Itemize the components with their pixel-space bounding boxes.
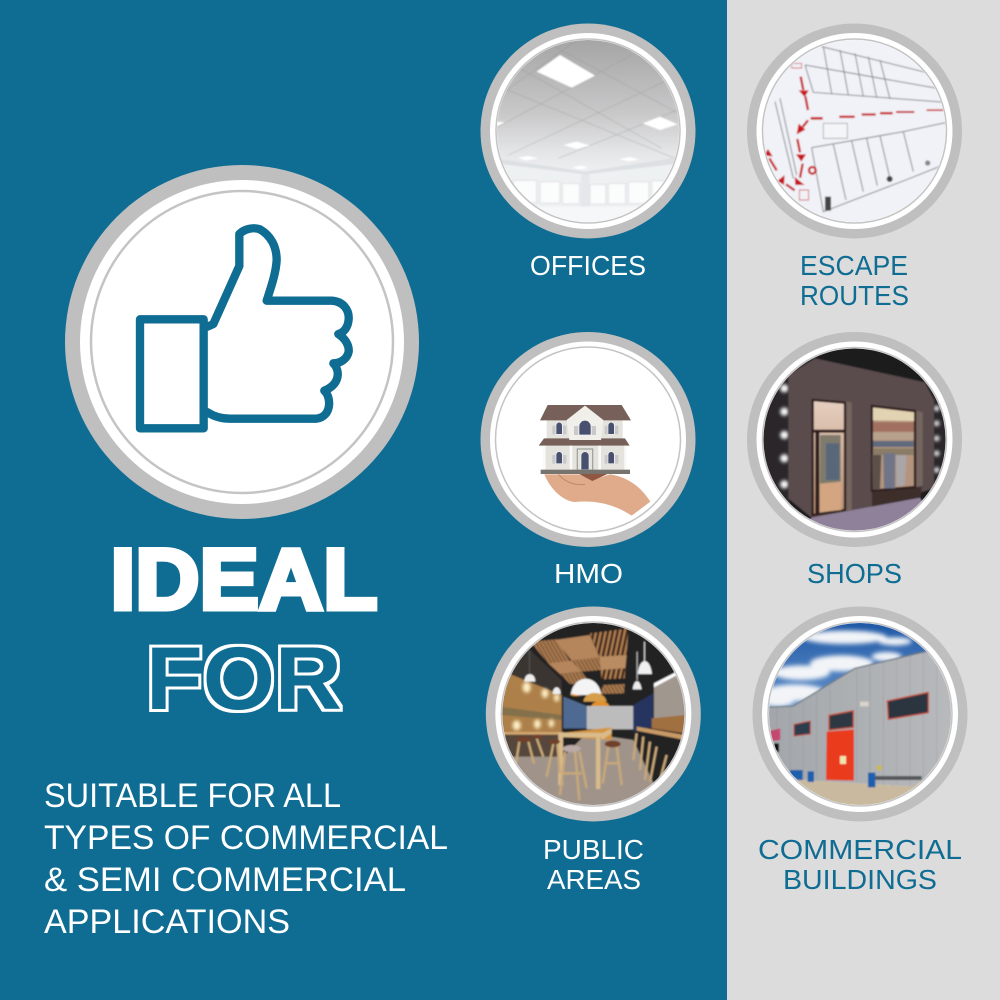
panel: escape routes	[747, 24, 962, 311]
photo: house on a hand	[539, 405, 650, 516]
badge: thumbs up	[65, 165, 419, 519]
label: shops: SHOPS	[807, 558, 902, 589]
label: escape routes: ROUTES	[800, 280, 909, 311]
text block: suitable for all: & SEMI COMMERCIAL	[44, 861, 406, 899]
icon: thumbs up	[140, 228, 349, 428]
photo: escape route floor plan	[757, 38, 953, 225]
panel: shops	[747, 332, 962, 589]
photo: office ceiling	[492, 38, 685, 228]
label: escape routes: ESCAPE	[800, 250, 908, 281]
label: commercial buildings	[758, 834, 962, 895]
panel: commercial buildings	[752, 606, 968, 895]
text block: suitable for all: APPLICATIONS	[44, 903, 290, 941]
panel: offices	[480, 24, 696, 281]
label: commercial buildings: COMMERCIAL	[758, 834, 962, 865]
photo: industrial building	[769, 623, 951, 805]
panel: HMO	[480, 332, 696, 589]
label: HMO: HMO	[554, 558, 623, 589]
label: escape routes	[800, 250, 909, 311]
label: public areas: AREAS	[547, 864, 641, 895]
label: public areas: PUBLIC	[543, 834, 644, 865]
background: blue panel	[0, 0, 727, 1000]
text block: suitable for all: SUITABLE FOR ALL	[44, 777, 341, 815]
photo: restaurant interior	[502, 623, 684, 805]
label: public areas	[543, 834, 644, 895]
photo: shop front	[764, 348, 946, 530]
background: grey panel	[727, 0, 1000, 1000]
label: offices: OFFICES	[530, 250, 646, 281]
text block: suitable for all: TYPES OF COMMERCIAL	[44, 819, 448, 857]
text block: suitable for all	[44, 777, 448, 941]
label: commercial buildings: BUILDINGS	[783, 864, 937, 895]
heading: IDEAL: IDEAL	[110, 532, 378, 628]
panel: public areas	[486, 606, 701, 895]
heading: FOR (outlined): FOR	[146, 628, 342, 728]
